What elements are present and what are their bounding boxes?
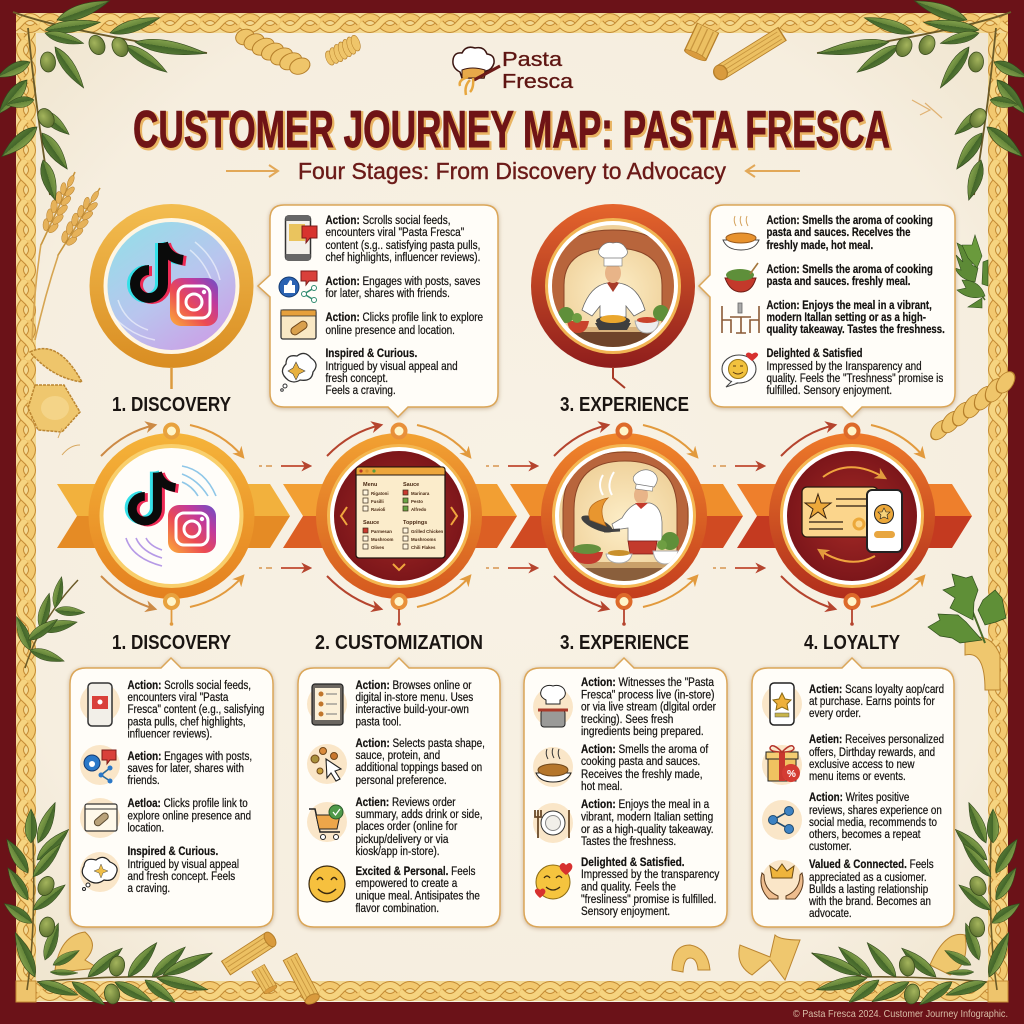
icon: phone [286, 216, 317, 260]
icon: steaming plate [533, 747, 573, 787]
connector: experience [613, 367, 625, 388]
timeline nodes [165, 424, 858, 608]
icon: thought [281, 353, 316, 391]
text: experience top: modern Itallan setting or as a high- [766, 311, 926, 324]
text: discovery panel: influencer reviews). [128, 728, 212, 741]
menu window: Sauce [403, 482, 419, 488]
text: discovery panel: Aetloa: Clicks profile link to [128, 797, 248, 810]
text: experience top: Impressed by the Iransparency and [766, 360, 922, 373]
icon: table and chairs [722, 303, 759, 333]
text: experience top: freshly made, hot meal. [766, 239, 873, 252]
icon: tablet menu [307, 684, 347, 725]
panel: loyalty [752, 658, 954, 927]
text: loyalty panel: Aetien: Receives personalized [809, 733, 944, 746]
menu window: Toppings [403, 520, 427, 526]
text: experience top: Delighted & Satisfied [766, 347, 862, 360]
node stems [170, 609, 854, 626]
parsley: right middle [928, 574, 1006, 643]
icon: toppings and cursor [307, 744, 347, 784]
text: experience panel: Action: Enjoys the meal in a [581, 798, 710, 811]
text: experience panel: ingredients being prepared. [581, 725, 704, 738]
text: loyalty panel: Actien: Scans loyalty aop/card [809, 683, 944, 696]
text: experience panel [581, 676, 720, 918]
text: customization panel: Excited & Personal. Feels [356, 865, 476, 878]
text: discovery panel: and fresh concept. Feels [128, 870, 236, 883]
text: experience top: Action: Enjoys the meal in a vibrant, [766, 299, 932, 312]
text: experience panel: Sensory enjoyment. [581, 905, 670, 918]
icon: engage [279, 271, 317, 302]
text: customization panel: empowered to create a [356, 877, 458, 890]
text: discovery top [326, 214, 483, 397]
connector: discovery [170, 367, 173, 389]
label: 4. loyalty: 4. LOYALTY [804, 632, 901, 654]
text: discovery top: Action: Scrolls social feeds, [326, 214, 450, 227]
olive branch: top right [817, 0, 1024, 202]
text: experience panel: Impressed by the transparency [581, 868, 720, 881]
text: discovery panel: Intrigued by visual appeal [128, 858, 239, 871]
text: loyalty panel: exclusive access to new [809, 758, 915, 771]
text: loyalty panel: Valued & Connected. Feels [809, 858, 934, 871]
label: 1. discovery top: 1. DISCOVERY [112, 394, 232, 416]
panel: discovery [70, 658, 273, 927]
text: customization panel: pasta tool. [356, 716, 401, 729]
label: 3. experience: 3. EXPERIENCE [560, 632, 689, 654]
text: customization panel: Action: Browses online or [356, 679, 472, 692]
text: experience panel: Receives the freshly made, [581, 768, 703, 781]
label: 2. customization: 2. CUSTOMIZATION [315, 632, 483, 654]
text: customization panel: kiosk/app in-store). [356, 845, 440, 858]
text: discovery panel: Inspired & Curious. [128, 845, 218, 858]
text: loyalty panel: reviews, shares experience on [809, 804, 942, 817]
arrow: subtitle left [226, 165, 278, 177]
text: discovery top: Action: Engages with posts, saves [326, 275, 481, 288]
callout: experience top [699, 205, 955, 417]
text: loyalty panel: appreciated as a cusiomer. [809, 871, 927, 884]
text: customization panel: places order (online for [356, 820, 458, 833]
menu window: Marinara [411, 491, 430, 496]
text: loyalty panel: with the brand. Becomes an [808, 895, 931, 908]
text: discovery panel: Fresca" content (e.g., salisfying [128, 703, 264, 716]
text: discovery top: fresh concept. [326, 372, 388, 385]
label: 3. experience top: 3. EXPERIENCE [560, 394, 689, 416]
text: loyalty panel: offers, Dirthday rewards, and [809, 746, 935, 759]
text: loyalty panel: menu items or events. [809, 770, 906, 783]
panel: experience [524, 658, 727, 927]
icon: smile [309, 866, 345, 902]
logo [453, 47, 574, 95]
text: loyalty panel: others, becomes a repeat [809, 828, 921, 841]
icon: thought cloud [80, 852, 120, 892]
chef flipping pasta scene [562, 452, 688, 581]
menu window: Menu [363, 482, 377, 488]
text: experience top: Action: Smells the aroma of cooking [766, 263, 933, 276]
icon: gift: % [787, 769, 796, 780]
text: experience panel: or via live stream (dlgital order [581, 701, 716, 714]
callout: discovery top [258, 205, 498, 417]
text: customization panel: Actien: Reviews order [356, 796, 456, 809]
text: experience panel: vibrant, modern Italian setting [581, 811, 713, 824]
text: discovery top: Inspired & Curious. [326, 347, 417, 360]
menu window [356, 467, 445, 558]
text: experience top: pasta and sauces. Recelves the [766, 226, 910, 239]
text: customization panel: summary, adds drink or side, [356, 808, 483, 821]
sprig: left middle [12, 576, 85, 668]
olive branch: top left [0, 0, 207, 202]
text: discovery panel: pasta pulls, chef highlights, [128, 716, 246, 729]
icon: pasta bowl [723, 216, 759, 250]
icon: pot with chef hat [533, 685, 573, 727]
arrow: subtitle right [746, 165, 800, 177]
menu window: Mushroom [371, 537, 394, 542]
text: customization panel: flavor combination. [356, 902, 439, 915]
text: experience top [766, 214, 945, 397]
text: loyalty panel: social media, recommends to [809, 816, 937, 829]
text: experience panel: Action: Smells the aroma of [581, 743, 709, 756]
icon: plate and cutlery [533, 803, 573, 843]
text: customization panel: digital in-store menu. Uses [356, 691, 474, 704]
stage 4 medallion [769, 425, 935, 609]
text: customization panel: personal preference. [356, 774, 447, 787]
menu window: Grilled Chicken [411, 529, 444, 534]
stage 2 medallion [316, 425, 482, 609]
loyalty card [802, 487, 878, 537]
text: loyalty panel: advocate. [809, 907, 852, 920]
top circle: discovery [90, 204, 254, 368]
logo: Pasta [502, 48, 563, 71]
text: experience panel: hot meal. [581, 780, 622, 793]
text: experience panel: Delighted & Satisfied. [581, 856, 685, 869]
menu window: Fusilli [371, 499, 384, 504]
text: experience top: Action: Smells the aroma of cooking [766, 214, 933, 227]
menu window: Ravioli [371, 507, 385, 512]
text: customization panel: additional toppings based on [356, 761, 482, 774]
text: experience panel: or as a high-quality takeaway. [581, 823, 714, 836]
text: loyalty panel [808, 683, 944, 920]
text: experience panel: and quality. Feels the [581, 881, 676, 894]
text: loyalty panel: Bullds a lasting relationship [809, 883, 928, 896]
wheat stalks [32, 168, 108, 342]
icon: loyalty phone [762, 683, 802, 725]
text: discovery top: Feels a craving. [326, 384, 396, 397]
icon: salad bowl [725, 263, 758, 292]
text: experience top: quality. Feels the "Treshness" promise is [766, 372, 944, 385]
text: customization panel: Action: Selects pasta shape, [356, 737, 485, 750]
text: loyalty panel: customer. [809, 840, 852, 853]
text: discovery top: encounters viral "Pasta Fresca" [326, 226, 464, 239]
menu window: Sauce [363, 520, 379, 526]
text: experience panel: cooking pasta and sauces. [581, 755, 700, 768]
text: loyalty panel: at purchase. Earns points for [809, 695, 935, 708]
text: discovery panel: saves for later, shares with [128, 762, 244, 775]
timeline band [57, 484, 972, 548]
olive branch: bottom left [1, 800, 215, 1009]
text: customization panel: interactive build-your-own [356, 703, 469, 716]
icon: social [80, 745, 120, 785]
menu window: Pesto [411, 499, 423, 504]
menu window: Chili Flakes [411, 545, 436, 550]
icon: delighted face [535, 863, 572, 899]
text: customization panel: sauce, protein, and [356, 749, 440, 762]
menu window: Olives [371, 545, 385, 550]
text: discovery panel: encounters viral "Pasta [128, 691, 229, 704]
logo: Fresca [502, 70, 574, 93]
text: experience panel: Tastes the freshness. [581, 835, 676, 848]
text: discovery panel: location. [128, 822, 164, 835]
text: loyalty panel: every order. [809, 707, 861, 720]
icon: share [762, 800, 802, 840]
chef scene [549, 230, 677, 351]
text: experience panel: "fresliness" promise is fulfilled. [581, 893, 716, 906]
text: experience top: fulfilled. Sensory enjoyment. [766, 384, 892, 397]
label: 1. discovery: 1. DISCOVERY [112, 632, 232, 654]
text: discovery panel: explore online presence and [128, 810, 251, 823]
stage 3 medallion [541, 425, 707, 609]
text: experience top: pasta and sauces. freshly meal. [766, 275, 910, 288]
text: customization panel [356, 679, 485, 915]
text: experience panel: Action: Witnesses the "Pasta [581, 676, 715, 689]
text: experience panel: trecking). Sees fresh [581, 713, 673, 726]
text: loyalty panel: Action: Writes positive [809, 791, 909, 804]
text: discovery top: for later, shares with friends. [326, 287, 450, 300]
menu window: Rigatoni [371, 491, 389, 496]
panel: customization [298, 658, 500, 927]
text: discovery panel [128, 679, 264, 895]
menu window: Alfredo [411, 507, 427, 512]
stage 1 medallion [88, 425, 254, 609]
parsley: right top [955, 235, 988, 308]
text: customization panel: pickup/delivery or via [356, 833, 449, 846]
text: discovery panel: a craving. [128, 882, 170, 895]
subtitle: Four Stages: From Discovery to Advocacy [298, 158, 726, 184]
text: discovery panel: Action: Scrolls social feeds, [128, 679, 251, 692]
menu window: Parmesan [371, 529, 392, 534]
text: experience panel: Fresca" process live (in-store) [581, 689, 714, 702]
icon: crown in hands [761, 860, 803, 900]
icon: phone [80, 683, 120, 726]
text: discovery top: Intrigued by visual appeal and [326, 360, 458, 373]
icon: browser [80, 798, 120, 838]
menu window: Mushrooms [411, 537, 436, 542]
text: discovery top: chef highlights, influencer reviews). [326, 251, 480, 264]
phone [867, 490, 902, 552]
text: discovery panel: Aetion: Engages with posts, [128, 750, 252, 763]
text: experience top: quality takeaway. Tastes the freshness. [766, 323, 945, 336]
text: discovery top: Action: Clicks profile link to explore [326, 311, 483, 324]
olive branch: bottom right [809, 800, 1023, 1009]
dashed arrows between stages [259, 466, 764, 568]
icon: shopping cart [307, 802, 347, 842]
text: discovery panel: friends. [128, 774, 160, 787]
icon: gift [762, 745, 802, 785]
icon: browser [281, 310, 316, 339]
text: discovery top: online presence and location. [326, 324, 455, 337]
icon: happy bubble [722, 352, 758, 387]
text: customization panel: unique meal. Antisipates the [356, 890, 480, 903]
text: discovery top: content (s.g.. satisfying pasta pulls, [326, 239, 480, 252]
top circle: experience [531, 204, 695, 368]
